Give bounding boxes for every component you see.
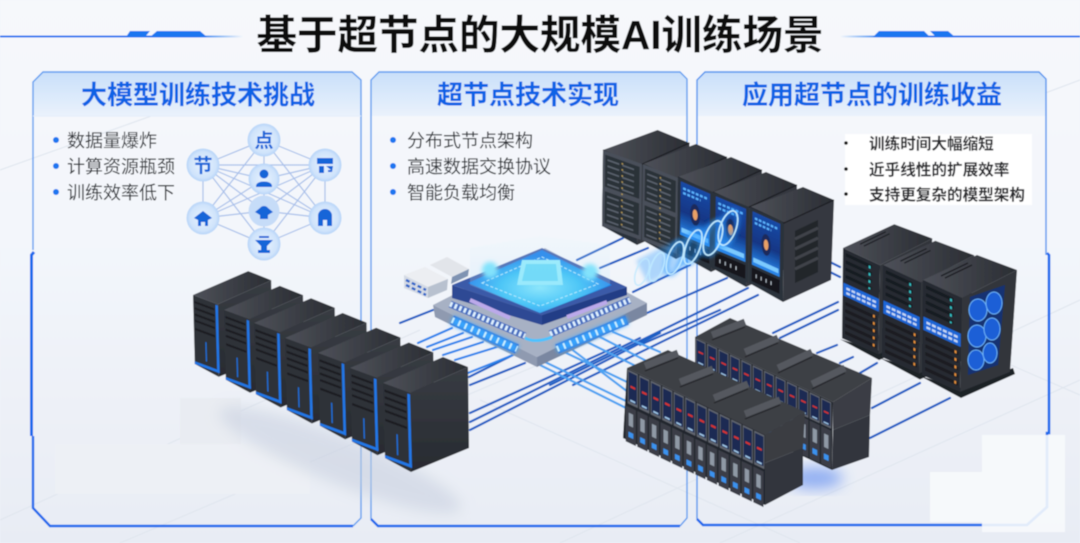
rack 1	[602, 130, 690, 245]
bullet list: implementation	[390, 131, 551, 203]
title decoration: right	[840, 31, 1080, 38]
central chip	[433, 236, 647, 367]
icon: node left: 节	[193, 155, 213, 177]
right rack 1	[840, 224, 932, 360]
bullet list: implementation: 分布式节点架构	[407, 131, 533, 151]
tower 3	[254, 298, 336, 408]
rack 3	[677, 157, 762, 272]
network switch	[404, 257, 469, 298]
icon: node left	[186, 148, 220, 182]
tower 6	[350, 343, 434, 455]
panel: benefits	[697, 72, 1049, 525]
bullet list: benefits: 支持更复杂的模型架构	[869, 186, 1025, 204]
rack 4	[712, 172, 797, 287]
heading: benefits: 应用超节点的训练收益	[742, 80, 1002, 110]
glass halo	[470, 236, 610, 313]
chip pins	[450, 300, 630, 349]
bullet list: challenges: 计算资源瓶颈	[67, 157, 175, 177]
rack 5	[749, 187, 834, 302]
icon: node right	[308, 148, 342, 182]
tower 5	[318, 328, 401, 439]
right rack 2	[880, 241, 974, 379]
bullet list: benefits	[844, 134, 1025, 204]
panel: implementation	[371, 72, 687, 526]
icon: node user	[248, 164, 280, 194]
icon: node left lower	[186, 202, 220, 234]
rack 2	[642, 144, 727, 259]
signal waves	[632, 208, 742, 287]
title decoration: left	[0, 31, 243, 38]
panel: challenges	[32, 72, 361, 526]
right rack 3 with fans	[920, 255, 1017, 398]
icon: node top: 点	[254, 130, 274, 152]
server group: right racks	[840, 224, 1017, 398]
server group: front storage stack	[623, 350, 805, 507]
tower 7	[383, 357, 469, 472]
white patches	[55, 398, 1065, 532]
bullet list: benefits: 近乎线性的扩展效率	[869, 160, 1009, 179]
server group: back storage stack	[695, 318, 872, 489]
tower 1	[193, 271, 272, 377]
bullet list: implementation: 高速数据交换协议	[407, 157, 551, 177]
title: 基于超节点的大规模AI训练场景	[256, 12, 824, 58]
icon: node robot	[248, 196, 280, 226]
bullet list: benefits: 训练时间大幅缩短	[869, 134, 994, 153]
tower 2	[224, 286, 304, 393]
icon: node right lower	[308, 202, 342, 234]
bullet list: challenges	[53, 131, 175, 203]
tower 4	[285, 313, 368, 423]
heading: challenges: 大模型训练技术挑战	[81, 80, 315, 110]
icon: node bottom	[248, 228, 280, 260]
icon: node top	[248, 124, 280, 156]
server row: left towers	[193, 271, 470, 531]
bullet list: challenges: 数据量爆炸	[67, 131, 157, 151]
connection cables	[400, 238, 950, 438]
network diagram	[186, 124, 342, 260]
bullet list: implementation: 智能负载均衡	[407, 183, 515, 203]
server row: top racks	[602, 130, 834, 302]
bullet list: challenges: 训练效率低下	[67, 183, 175, 203]
heading: implementation: 超节点技术实现	[437, 80, 619, 110]
